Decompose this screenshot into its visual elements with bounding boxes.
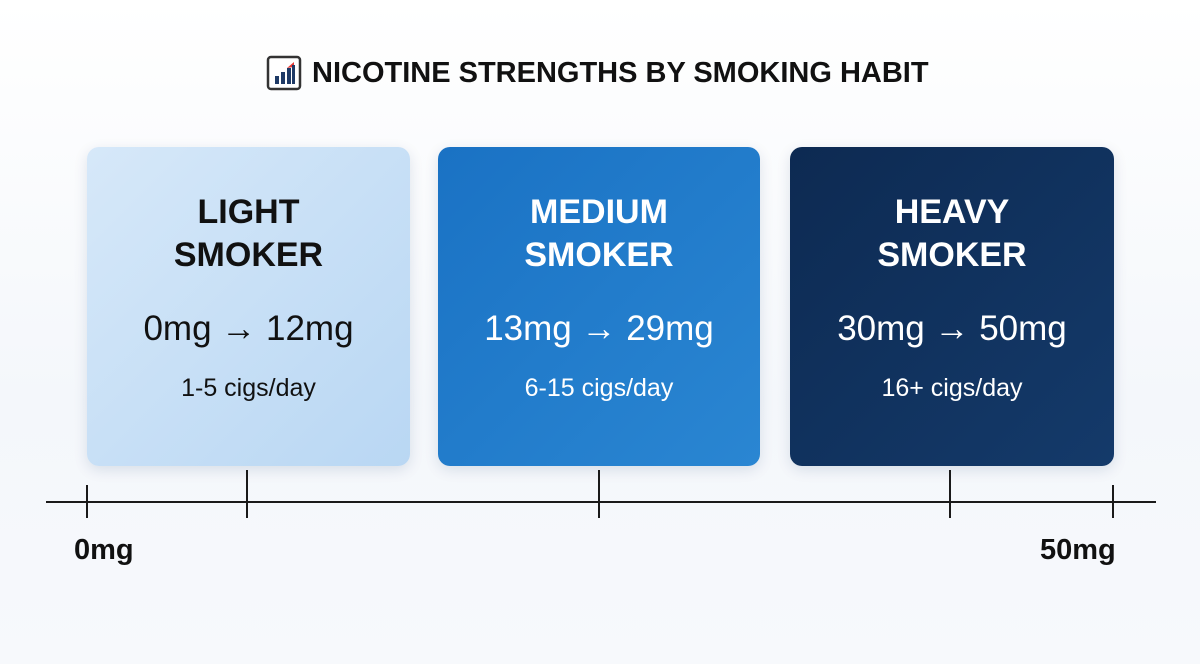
title: NICOTINE STRENGTHS BY SMOKING HABIT <box>312 56 929 88</box>
label: 50mg: 50mg <box>1040 534 1116 566</box>
panel: heavy smoker: HEAVY <box>895 193 1009 231</box>
panel: heavy smoker: 30mg → 50mg <box>837 309 1067 348</box>
axis <box>46 470 1156 518</box>
panel: medium smoker <box>438 147 760 466</box>
label: 0mg: 0mg <box>74 534 134 566</box>
panel: heavy smoker <box>790 147 1114 466</box>
panel: heavy smoker: SMOKER <box>877 236 1027 274</box>
icon: bar chart <box>266 56 302 90</box>
panel: light smoker <box>87 147 410 466</box>
panel: medium smoker: 13mg → 29mg <box>484 309 714 348</box>
panel: light smoker: LIGHT <box>198 193 299 231</box>
panel: medium smoker: SMOKER <box>524 236 674 274</box>
panel: medium smoker: 6-15 cigs/day <box>525 374 673 402</box>
panel: light smoker: SMOKER <box>174 236 323 274</box>
panel: light smoker: 0mg → 12mg <box>143 309 354 348</box>
panel: light smoker: 1-5 cigs/day <box>181 374 316 402</box>
panel: medium smoker: MEDIUM <box>530 193 668 231</box>
panel: heavy smoker: 16+ cigs/day <box>881 374 1023 402</box>
